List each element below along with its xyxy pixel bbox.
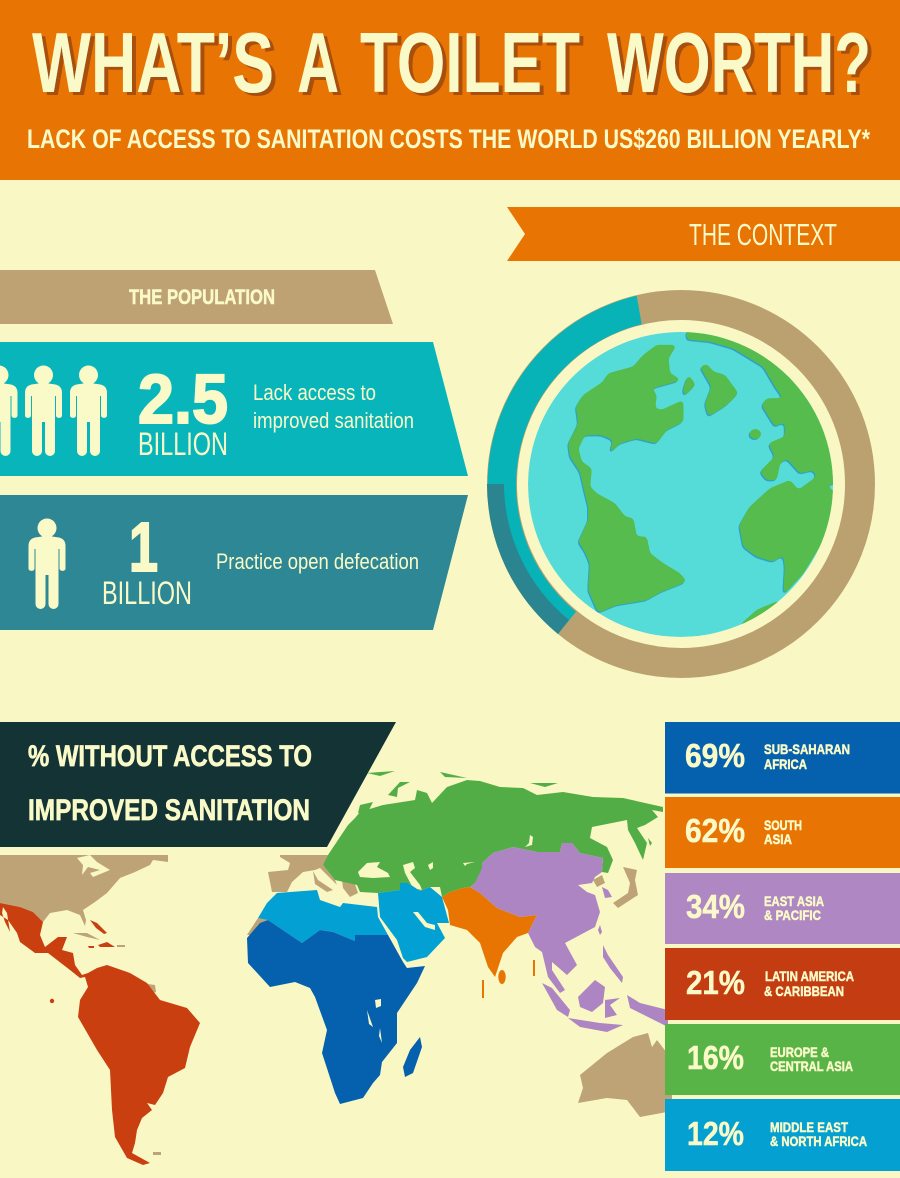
legend row: latin america: 21% — [686, 964, 745, 1001]
legend row: europe and central asia: EUROPE & — [770, 1044, 829, 1060]
region: latin america — [0, 903, 200, 1165]
banner: % without access: IMPROVED SANITATION — [28, 794, 310, 827]
region: sub-saharan africa — [247, 920, 425, 1104]
title: A — [297, 16, 339, 111]
legend row: south asia: 62% — [685, 812, 745, 849]
title: TOILET — [360, 16, 580, 111]
legend — [665, 722, 900, 1171]
legend row: middle east and north africa: 12% — [687, 1115, 744, 1152]
legend row: latin america: LATIN AMERICA — [765, 968, 854, 984]
ribbon: the population: THE POPULATION — [129, 286, 275, 309]
world map — [0, 771, 672, 1165]
ring: open defecation — [487, 484, 569, 634]
legend row: east asia and pacific: EAST ASIA — [764, 893, 824, 909]
legend row: south asia: SOUTH — [764, 817, 802, 833]
ribbon: the context — [507, 207, 900, 261]
legend row: sub-saharan africa — [665, 722, 900, 794]
banner: % without access — [0, 722, 396, 847]
legend row: middle east and north africa — [665, 1099, 900, 1171]
icon: three people — [0, 366, 107, 456]
header band — [0, 0, 900, 180]
banner: % without access: % WITHOUT ACCESS TO — [28, 740, 312, 773]
legend row: sub-saharan africa: 69% — [685, 737, 745, 774]
legend row: south asia — [665, 797, 900, 868]
region: south asia — [442, 887, 537, 998]
icon: earth — [528, 330, 840, 637]
legend row: east asia and pacific: 34% — [686, 888, 745, 925]
ring: lack sanitation — [488, 296, 642, 634]
text: open defecation: Practice open defecation — [216, 549, 419, 574]
legend row: south asia: ASIA — [764, 831, 792, 847]
region: tan north america and others — [0, 855, 672, 1155]
legend row: middle east and north africa: & NORTH AFRICA — [770, 1133, 867, 1149]
legend row: latin america: & CARIBBEAN — [764, 983, 844, 999]
region: east asia and pacific — [470, 843, 668, 1032]
icon: person — [28, 518, 66, 609]
title: WHAT’S — [32, 16, 274, 111]
ribbon: the population — [0, 270, 393, 324]
panel: 1 billion — [0, 495, 468, 630]
legend row: europe and central asia: 16% — [687, 1039, 744, 1076]
legend row: east asia and pacific — [665, 873, 900, 944]
legend row: sub-saharan africa: SUB-SAHARAN — [764, 741, 850, 757]
stat: 1 billion — [102, 508, 192, 611]
text: lack access: Lack access to — [253, 380, 376, 405]
legend row: middle east and north africa: MIDDLE EAST — [770, 1119, 848, 1135]
region: middle east and north africa — [258, 883, 449, 962]
legend row: east asia and pacific: & PACIFIC — [764, 907, 821, 923]
stat: 1 billion: 1 — [129, 508, 158, 586]
stat: 2.5 billion: BILLION — [138, 426, 228, 462]
text: lack access — [253, 380, 414, 433]
panel: 2.5 billion — [0, 342, 468, 476]
ring: rest of population — [502, 305, 860, 663]
text: lack access: improved sanitation — [253, 408, 414, 433]
legend row: europe and central asia: CENTRAL ASIA — [770, 1058, 853, 1074]
region: russian arctic islands — [358, 771, 652, 846]
region: europe and central asia — [323, 780, 663, 897]
legend row: latin america — [665, 948, 900, 1020]
title — [32, 16, 871, 111]
stat: 1 billion: BILLION — [102, 575, 192, 611]
stat: 2.5 billion: 2.5 — [138, 360, 228, 438]
legend row: sub-saharan africa: AFRICA — [764, 756, 807, 772]
globe chart — [487, 296, 860, 663]
legend row: europe and central asia — [665, 1024, 900, 1095]
